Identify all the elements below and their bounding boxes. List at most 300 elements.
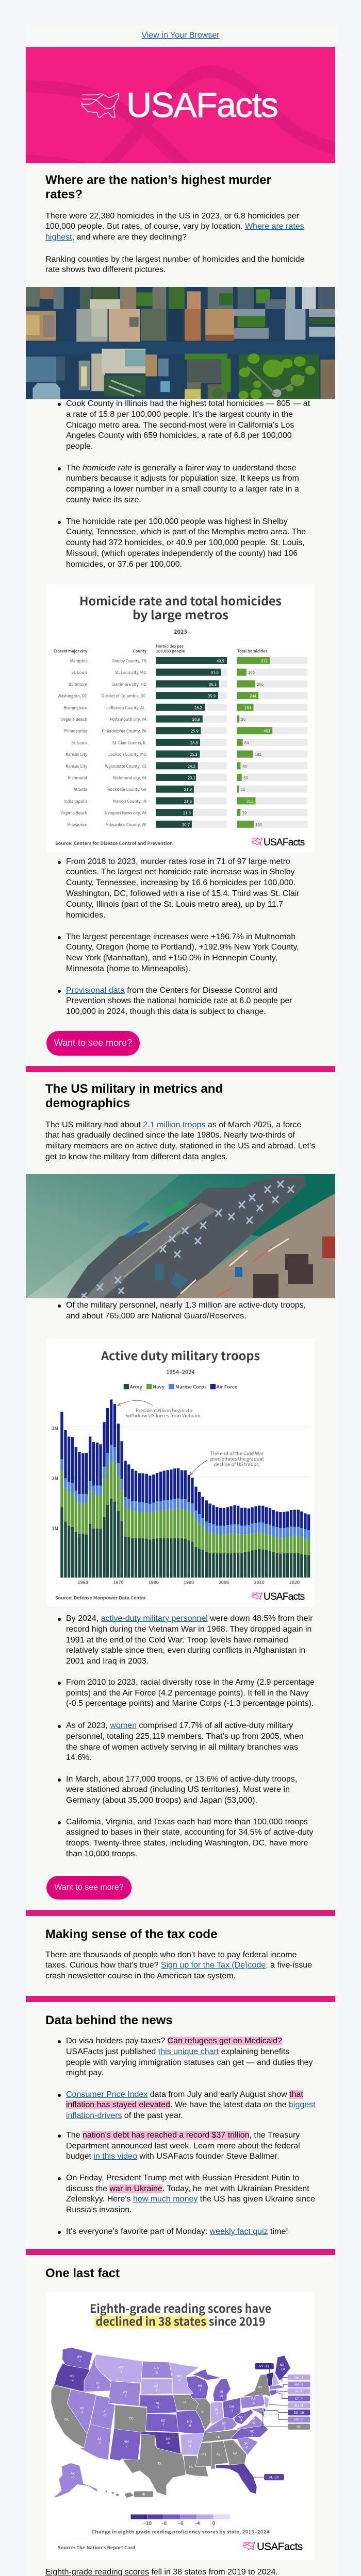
map of US states: SD bbox=[154, 2383, 158, 2388]
bullet: visa holders: Do visa holders pay taxes? Can refugees get on Medicaid? bbox=[66, 2037, 282, 2045]
row: Philadelphia: Philadelphia bbox=[63, 728, 87, 734]
x axis labels: 1970 bbox=[113, 1580, 124, 1586]
map of US states: -6 bbox=[96, 2385, 100, 2389]
bullet: percentage increases bbox=[66, 932, 299, 975]
row: Washington, DC: 35.9 bbox=[208, 693, 216, 699]
intro paragraph bbox=[45, 212, 304, 242]
map of US states: AK bbox=[71, 2471, 75, 2475]
row: St. Louis city: 37.6 bbox=[211, 670, 219, 675]
bullet: visa holders: might pay. bbox=[66, 2069, 104, 2077]
annotation: Cold War: The end of the Cold War bbox=[210, 1450, 264, 1457]
bullet: Cook County: Angeles County with 659 homicides, a rate of 6.8 per 100,000 bbox=[66, 431, 292, 440]
ranking paragraph: rate shows two different pictures. bbox=[45, 265, 166, 274]
bullet: women bbox=[66, 1721, 304, 1764]
map of US states: -5 bbox=[80, 2410, 84, 2414]
bullet: visa holders: people with varying immigration statuses can get — and duties they bbox=[66, 2058, 313, 2067]
row: Birmingham: Jefferson County, AL bbox=[107, 705, 145, 710]
row: St. Louis city: St. Louis city, MO bbox=[115, 670, 146, 675]
chart title: by large metros bbox=[133, 605, 228, 623]
map of US states: MI bbox=[219, 2389, 223, 2394]
map of US states: -7 bbox=[230, 2409, 234, 2413]
row: Marion County: 211 bbox=[247, 799, 253, 804]
map of US states: IN bbox=[215, 2407, 218, 2412]
chart title: Eighth-grade reading scores have bbox=[90, 2300, 271, 2316]
bullet: active-duty down: By 2024, active-duty military personnel were down 48.5% from their bbox=[66, 1614, 313, 1623]
bullet: nation's debt: The nation’s debt has reached a record $37 trillion, the Treasury bbox=[66, 2131, 300, 2140]
chart subtitle: 2023 bbox=[174, 628, 187, 636]
bullet: consumer price index: inflation-drivers of the past year. bbox=[66, 2111, 183, 2120]
annotation: Cold War: decline of US troops. bbox=[214, 1461, 260, 1467]
x axis labels: 1960 bbox=[78, 1580, 88, 1586]
row: Portsmouth: 26.9 bbox=[192, 717, 200, 722]
x axis labels: 2000 bbox=[219, 1580, 229, 1586]
bullet: Cook County: people. bbox=[66, 442, 93, 451]
button: want to see more: Want to see more? bbox=[54, 1883, 124, 1892]
legend scale: −6 bbox=[177, 2519, 184, 2527]
row: Richmond bbox=[68, 774, 307, 781]
y axis labels: 3M bbox=[52, 1425, 58, 1431]
row: Wyandotte: Kansas City bbox=[65, 764, 87, 769]
chart title: declined in 38 states since 2019 bbox=[96, 2312, 265, 2329]
y axis labels bbox=[52, 1425, 58, 1532]
row: Baltimore bbox=[69, 680, 307, 687]
legend: Navy bbox=[153, 1384, 165, 1390]
row: Philadelphia bbox=[63, 727, 307, 734]
bullet: Ukraine: On Friday, President Trump met with Russian President Putin to bbox=[66, 2174, 299, 2182]
row: Washington, DC: District of Columbia, DC bbox=[102, 693, 146, 699]
annotation: Nixon: President Nixon begins to bbox=[136, 1407, 192, 1414]
map of US states: -6 bbox=[71, 2475, 75, 2479]
bullet: states: assigned to bases in their state, accounting for 34.5% of active-duty bbox=[66, 1828, 313, 1837]
map of US states: VT -11 bbox=[259, 2364, 270, 2368]
map of US states: -4 bbox=[188, 2444, 191, 2448]
map of US states: -7 bbox=[78, 2359, 81, 2363]
row: St. Clair bbox=[71, 739, 307, 746]
button: want to see more: Want to see more? bbox=[54, 1038, 132, 1048]
map of US states: AZ bbox=[97, 2436, 102, 2441]
row: Portsmouth: 26 bbox=[241, 717, 245, 722]
row: Wyandotte: Wyandotte County, KS bbox=[105, 764, 146, 769]
ranking paragraph: Ranking counties by the largest number of homicides and the homicide bbox=[45, 255, 305, 264]
bullet: personnel bbox=[66, 1300, 306, 1322]
map of US states: AR bbox=[188, 2439, 192, 2444]
map of US states: -9 bbox=[71, 2378, 74, 2382]
legend bbox=[124, 1384, 237, 1390]
panel: one last fact bbox=[45, 2266, 315, 2576]
paragraph: crash newsletter course in the American tax system. bbox=[45, 1972, 236, 1980]
map of US states: DE -10 bbox=[294, 2410, 304, 2414]
intro paragraph: that has gradually declined since the late 1980s. Nearly two-thirds of bbox=[45, 1131, 295, 1140]
row: Washington, DC bbox=[58, 692, 307, 699]
map of US states bbox=[51, 2347, 310, 2498]
paragraph: Eighth-grade reading scores fell in 38 states from 2019 to 2024. bbox=[45, 2568, 278, 2576]
row: Rockdale: Atlanta bbox=[74, 787, 87, 792]
y axis labels: 1M bbox=[52, 1526, 58, 1532]
bullet: women: personnel, totaling 225,119 members. That’s up from 2005, when bbox=[66, 1732, 304, 1741]
intro paragraph: 100,000 people. But rates, of course, vary by location. Where are rates bbox=[45, 222, 304, 231]
heading: rates? bbox=[45, 188, 83, 201]
row: Baltimore: Baltimore city, MD bbox=[112, 682, 146, 687]
chart title: Active duty military troops bbox=[101, 1346, 260, 1364]
row: Newport News: Virginia Beach bbox=[60, 810, 87, 816]
map of US states: OH bbox=[229, 2404, 234, 2409]
bullet: consumer price index: Consumer Price Index data from July and early August show that bbox=[66, 2090, 303, 2099]
photo: aerial view of city blocks bbox=[26, 287, 335, 399]
map of US states: -8 bbox=[188, 2424, 191, 2428]
map of US states: -5 bbox=[252, 2401, 255, 2405]
bullet: Shelby County: county had 372 homicides, or 40.9 per 100,000 people. St. Louis, bbox=[66, 538, 305, 547]
row: Wyandotte: 24.2 bbox=[188, 764, 195, 769]
row: St. Clair: St. Clair County, IL bbox=[112, 740, 146, 745]
row: Milwaukee: Milwaukee bbox=[67, 822, 87, 827]
source note: Source: Centers for Disease Control and Prevention bbox=[55, 840, 173, 846]
heading: Data behind the news bbox=[45, 2013, 173, 2027]
annotation: Cold War bbox=[210, 1450, 264, 1467]
legend scale: −4 bbox=[194, 2519, 200, 2527]
row: Richmond: Richmond bbox=[68, 775, 87, 781]
row: St. Clair: 25.5 bbox=[190, 740, 198, 745]
row: Philadelphia: 25.9 bbox=[191, 728, 199, 734]
map of US states: TX bbox=[157, 2461, 161, 2465]
panel: military story bbox=[26, 1082, 335, 1900]
chart: reading score map bbox=[46, 2293, 315, 2560]
browser link: View in Your Browser bbox=[142, 31, 219, 40]
map of US states: MS bbox=[202, 2452, 207, 2456]
column headers: Total homicides bbox=[237, 648, 267, 654]
row: St. Clair: 64 bbox=[244, 740, 249, 745]
bullet: stationed abroad: In March, about 177,000 troops, or 13.6% of active-duty troops, bbox=[66, 1775, 297, 1784]
map of US states: DC bbox=[297, 2425, 301, 2429]
bullet: Cook County bbox=[66, 399, 310, 452]
bullet: women: the share of women actively serving in all military branches was bbox=[66, 1743, 298, 1752]
map of US states: WY bbox=[123, 2389, 128, 2394]
map of US states: NV bbox=[79, 2406, 84, 2410]
bullet: Shelby County: County, Tennessee, which is part of the Memphis metro area. The bbox=[66, 528, 306, 536]
bullet: consumer price index bbox=[66, 2090, 316, 2122]
bullet: homicide rate bbox=[66, 463, 299, 506]
row: Jackson County bbox=[65, 751, 307, 758]
highlight behind title bbox=[94, 2315, 208, 2328]
map of US states: -6 bbox=[155, 2370, 158, 2375]
panel: tax code bbox=[45, 1927, 312, 1980]
row: Birmingham bbox=[64, 704, 307, 711]
chart subtitle: 1954–2024 bbox=[166, 1368, 195, 1376]
icon: USAFacts map logo bbox=[81, 93, 119, 118]
row: Birmingham: 28.2 bbox=[194, 705, 202, 710]
bullet: homicide rate: county twice its size. bbox=[66, 496, 141, 504]
bullet: states bbox=[66, 1817, 313, 1860]
bullet: visa holders bbox=[66, 2036, 313, 2079]
map of US states: CT -7 bbox=[295, 2396, 303, 2400]
intro paragraph: The US military had about 2.1 million troops as of March 2025, a force bbox=[45, 1121, 301, 1129]
intro paragraph: highest, and where are they declining? bbox=[45, 233, 187, 242]
heading bbox=[45, 173, 271, 201]
map of US states: NE bbox=[155, 2401, 160, 2405]
map of US states: -5 bbox=[98, 2441, 101, 2445]
bullet: racial diversity: From 2010 to 2023, racial diversity rose in the Army (2.9 percentage bbox=[66, 1678, 315, 1687]
map of US states: -4 bbox=[119, 2369, 123, 2374]
x axis labels: 2010 bbox=[254, 1580, 265, 1586]
row: Birmingham: 184 bbox=[244, 705, 252, 710]
row: Marion County bbox=[64, 797, 307, 804]
bullet: active-duty down: 1991 at the end of the Cold War. Troop levels have remained bbox=[66, 1636, 288, 1645]
photo: aircraft carrier at dock bbox=[26, 1174, 335, 1298]
map of US states: MO bbox=[187, 2419, 192, 2424]
logo: USAFacts: USAFacts bbox=[257, 2540, 303, 2552]
bullet: personnel: Of the military personnel, nearly 1.3 million are active-duty troops, bbox=[66, 1301, 306, 1310]
paragraph bbox=[45, 1951, 312, 1980]
bullet: racial diversity: points) and the Air Force (4.2 percentage points). It fell in the Navy bbox=[66, 1689, 308, 1698]
bullet: Shelby County bbox=[66, 517, 306, 570]
legend: Army bbox=[129, 1384, 142, 1390]
bullet: provisional data: 100,000 in 2024, though this data is subject to change. bbox=[66, 1007, 266, 1016]
bullet: Ukraine: discuss the war in Ukraine. Today, he met with Ukrainian President bbox=[66, 2184, 309, 2193]
bullet: homicide rate: numbers because it adjusts for population size. It keeps us from bbox=[66, 474, 299, 483]
legend caption: Change in eighth grade reading proficiency scores by state, 2019–2024 bbox=[92, 2528, 270, 2535]
header banner with logo bbox=[26, 47, 335, 163]
map of US states: NY bbox=[258, 2385, 262, 2389]
row: Baltimore: 205 bbox=[257, 682, 264, 687]
row: St. Louis city bbox=[71, 669, 307, 676]
row: Milwaukee: 190 bbox=[255, 822, 262, 827]
annotation: Cold War: precipitates the gradual bbox=[210, 1455, 264, 1462]
paragraph: There are thousands of people who don’t have to pay federal income bbox=[45, 1951, 297, 1959]
row: Memphis: 372 bbox=[261, 658, 268, 664]
row: Newport News: Newport News city, VA bbox=[105, 810, 146, 816]
bullet: consumer price index: inflation has stayed elevated. We have the latest data on the biggest bbox=[66, 2100, 316, 2109]
map of US states: -7 bbox=[161, 2422, 165, 2427]
chart title bbox=[90, 2300, 271, 2329]
button: want to see more bbox=[46, 1031, 140, 1056]
button: want to see more bbox=[46, 1876, 132, 1900]
map of US states: NJ -4 bbox=[295, 2403, 303, 2408]
legend scale bbox=[131, 2514, 230, 2527]
heading: One last fact bbox=[45, 2266, 120, 2280]
map of US states: IA bbox=[183, 2400, 187, 2404]
map of US states: KY bbox=[222, 2421, 226, 2425]
x axis labels: 1980 bbox=[149, 1580, 159, 1586]
bullet: personnel: and about 765,000 are National Guard/Reserves. bbox=[66, 1312, 247, 1320]
row: Milwaukee: 20.7 bbox=[182, 822, 190, 827]
bullet: Cook County: a rate of 15.8 per 100,000 people. It’s the largest county in the bbox=[66, 410, 293, 419]
chart title bbox=[79, 591, 282, 623]
row: St. Louis city: St. Louis bbox=[71, 670, 87, 675]
row: Baltimore: 36.3 bbox=[209, 682, 217, 687]
bullet: racial diversity bbox=[66, 1677, 315, 1709]
row: Baltimore: Baltimore bbox=[69, 682, 87, 687]
map of US states: NM bbox=[124, 2439, 129, 2444]
legend scale: −10 bbox=[143, 2519, 152, 2527]
bullet: homicide rate: The homicide rate is generally a fairer way to understand these bbox=[66, 464, 296, 472]
bullet: quiz: It’s everyone’s favorite part of Monday: weekly fact quiz time! bbox=[66, 2227, 288, 2236]
map of US states: OK bbox=[166, 2436, 171, 2441]
row: Jackson County: 182 bbox=[255, 752, 261, 757]
column headers: 100,000 people bbox=[156, 648, 185, 654]
x axis labels: 2020 bbox=[289, 1580, 300, 1586]
chart: active duty military troops bbox=[46, 1338, 315, 1606]
bullet: racial diversity: (-0.5 percentage points) and Marine Corps (-1.3 percentage points). bbox=[66, 1699, 314, 1708]
map of US states: -5 bbox=[123, 2393, 127, 2398]
heading: demographics bbox=[45, 1096, 130, 1110]
column headers: County bbox=[133, 648, 147, 654]
bullet: provisional data: Prevention shows the national homicide rate at 6.0 people per bbox=[66, 996, 292, 1005]
bullet: Cook County: Chicago metro area. The second-most were in California’s Los bbox=[66, 421, 294, 430]
column headers: Closest major city bbox=[54, 648, 88, 654]
map of US states: MN bbox=[176, 2374, 182, 2378]
map of US states: RI -4 bbox=[296, 2389, 303, 2393]
bullet: murder rates rose: County, Illinois (part of the St. Louis metro area), up by 11.7 bbox=[66, 900, 283, 909]
map of US states: -6 bbox=[252, 2420, 255, 2425]
row: Jackson County: Kansas City bbox=[65, 752, 87, 757]
column headers: Homicides per bbox=[156, 643, 184, 649]
bullet: visa holders: USAFacts just published this unique chart explaining benefits bbox=[66, 2047, 289, 2056]
logo: USAFacts: USAFacts bbox=[264, 1591, 305, 1602]
row: Jackson County: 25.3 bbox=[190, 752, 198, 757]
row: Philadelphia: 402 bbox=[264, 728, 270, 734]
bullet: murder rates rose: From 2018 to 2023, murder rates rose in 71 of 97 large metro bbox=[66, 857, 290, 866]
row: Memphis bbox=[70, 657, 307, 664]
intro paragraph: get to know the military from different data angles. bbox=[45, 1153, 228, 1161]
intro paragraph: military members are on active duty, stationed in the US and abroad. Let’s bbox=[45, 1142, 315, 1150]
bullet: stationed abroad: were stationed abroad (including US territories). Most were in bbox=[66, 1785, 290, 1794]
intro paragraph: There were 22,380 homicides in the US in 2023, or 6.8 homicides per bbox=[45, 212, 299, 221]
bullet: active-duty down: relatively stable since then, even during conflicts in Afghanistan in bbox=[66, 1646, 305, 1655]
bullet: nation's debt bbox=[66, 2130, 300, 2162]
bullet: murder rates rose bbox=[66, 857, 300, 921]
row: St. Clair: St. Louis bbox=[71, 740, 87, 745]
map of US states: CO bbox=[129, 2416, 134, 2420]
map of US states: IL bbox=[201, 2410, 204, 2414]
map of US states: -8 bbox=[156, 2405, 159, 2409]
heading bbox=[45, 1082, 223, 1110]
row: Milwaukee: Milwaukee County, WI bbox=[106, 822, 146, 827]
logo: USAFacts: USAFacts bbox=[264, 837, 305, 848]
row: Newport News bbox=[60, 809, 307, 816]
map of US states: MA -5 bbox=[294, 2382, 304, 2386]
map of US states: -4 bbox=[215, 2411, 219, 2416]
bullet: percentage increases: Minnesota (home to Minneapolis). bbox=[66, 964, 190, 973]
map of US states: NC bbox=[250, 2429, 254, 2433]
y axis labels: 2M bbox=[52, 1476, 58, 1482]
map of US states: UT bbox=[103, 2409, 107, 2413]
row: St. Louis city: 106 bbox=[248, 670, 255, 675]
row: Memphis: Shelby County, TN bbox=[112, 658, 146, 664]
map of US states: LA bbox=[189, 2464, 193, 2469]
chart title: Homicide rate and total homicides bbox=[79, 591, 282, 609]
panel: homicide story bbox=[26, 173, 335, 1056]
bullet: Ukraine bbox=[66, 2173, 315, 2216]
row: Rockdale bbox=[74, 786, 307, 793]
bullet: murder rates rose: County, Tennessee, increasing by 16.6 homicides per 100,000. bbox=[66, 878, 296, 887]
map of US states: FL -10 bbox=[269, 2475, 279, 2479]
bullet: Ukraine: Zelenskyy. Here's how much money the US has given Ukraine since bbox=[66, 2195, 315, 2204]
source note: Source: Defense Manpower Data Center bbox=[55, 1595, 146, 1601]
bullet: active-duty down bbox=[66, 1614, 313, 1667]
logo wordmark: USAFacts bbox=[126, 86, 277, 125]
paragraph: taxes. Curious how that’s true? Sign up for the Tax (De)code, a five-issue bbox=[45, 1961, 312, 1970]
row: Philadelphia: Philadelphia County, PA bbox=[102, 728, 146, 734]
x axis labels bbox=[78, 1580, 300, 1586]
bullet: states: troops. Twenty-three states, including Washington, DC, have more bbox=[66, 1839, 308, 1848]
map of US states: OR bbox=[70, 2374, 74, 2378]
map of US states: MD -6 bbox=[294, 2417, 304, 2421]
row: Portsmouth: Virginia Beach bbox=[60, 717, 87, 722]
map of US states: -4 bbox=[177, 2378, 181, 2382]
row: Newport News: 21.3 bbox=[183, 810, 191, 816]
map of US states: CA bbox=[64, 2417, 69, 2421]
chart: homicide rate and total homicides bbox=[46, 584, 315, 852]
bullet: Shelby County: The homicide rate per 100,000 people was highest in Shelby bbox=[66, 517, 288, 526]
row: Richmond: 23.1 bbox=[188, 775, 195, 781]
row: Memphis: Memphis bbox=[70, 658, 87, 664]
bullet: stationed abroad: Germany (about 35,000 troops) and Japan (53,000). bbox=[66, 1796, 257, 1805]
map of US states: WI bbox=[198, 2383, 202, 2387]
row: Memphis: 40.9 bbox=[217, 658, 224, 664]
bullet: percentage increases: New York (Manhattan), and +150.0% in Hennepin County, bbox=[66, 954, 277, 962]
map of US states: KS bbox=[161, 2418, 165, 2422]
bullet: provisional data: Provisional data from the Centers for Disease Control and bbox=[66, 986, 277, 995]
bullet: provisional data bbox=[66, 986, 292, 1018]
row: Rockdale: Rockdale County, GA bbox=[108, 787, 146, 792]
legend scale: 0 bbox=[212, 2519, 216, 2527]
x axis labels: 1990 bbox=[184, 1580, 194, 1586]
map of US states: VA bbox=[251, 2416, 255, 2421]
row: Portsmouth bbox=[60, 715, 307, 722]
source note: Source: The Nation's Report Card bbox=[58, 2544, 135, 2550]
bullet: women: As of 2023, women comprised 17.7% of all active-duty military bbox=[66, 1721, 293, 1730]
map of US states: -7 bbox=[125, 2444, 128, 2448]
annotation: Nixon: withdraw US forces from Vietnam. bbox=[126, 1412, 202, 1419]
heading: Making sense of the tax code bbox=[45, 1927, 217, 1941]
annotation: Nixon bbox=[126, 1407, 202, 1419]
map of US states: SC bbox=[244, 2441, 249, 2445]
bullet: Ukraine: Russia's invasion. bbox=[66, 2206, 132, 2214]
map of US states: -3 bbox=[154, 2387, 158, 2392]
map of US states: WV bbox=[238, 2414, 243, 2419]
heading: The US military in metrics and bbox=[45, 1082, 223, 1096]
row: Portsmouth: Portsmouth city, VA bbox=[110, 717, 146, 722]
map of US states: PA bbox=[251, 2396, 255, 2400]
bullet: nation's debt: budget in this video with USAFacts founder Steve Ballmer. bbox=[66, 2152, 280, 2161]
row: Jackson County: Jackson County, MO bbox=[108, 752, 146, 757]
bullet: murder rates rose: homicides. bbox=[66, 911, 105, 920]
bullet: nation's debt: Department announced last week. Learn more about the federal bbox=[66, 2142, 300, 2150]
row: Marion County: 21.8 bbox=[184, 799, 192, 804]
map of US states: ID bbox=[96, 2381, 100, 2385]
map of US states: -9 bbox=[167, 2441, 170, 2445]
column headers bbox=[54, 643, 267, 654]
row: Newport News: 39 bbox=[242, 810, 247, 816]
intro paragraph bbox=[45, 1121, 315, 1161]
row: Milwaukee bbox=[67, 821, 307, 828]
map of US states: WA bbox=[77, 2354, 82, 2359]
map of US states: ND bbox=[154, 2366, 159, 2370]
map of US states: -6 bbox=[245, 2445, 248, 2449]
row: Richmond: 53 bbox=[243, 775, 248, 781]
row: Rockdale: 21 bbox=[240, 787, 245, 792]
map of US states: -4 bbox=[239, 2418, 243, 2422]
bullet: states: than 10,000 troops. bbox=[66, 1850, 137, 1858]
row: Wyandotte bbox=[65, 762, 307, 769]
map of US states: GA bbox=[233, 2451, 237, 2455]
map of US states: MT bbox=[119, 2365, 123, 2369]
bullet: active-duty down: 2001 and Iraq in 2003. bbox=[66, 1657, 149, 1666]
row: Marion County: Marion County, IN bbox=[113, 799, 146, 804]
map of US states: -8 bbox=[250, 2433, 254, 2437]
map of US states: -6 bbox=[103, 2413, 107, 2417]
legend: Air Force bbox=[216, 1384, 237, 1390]
bullet: stationed abroad bbox=[66, 1774, 297, 1806]
